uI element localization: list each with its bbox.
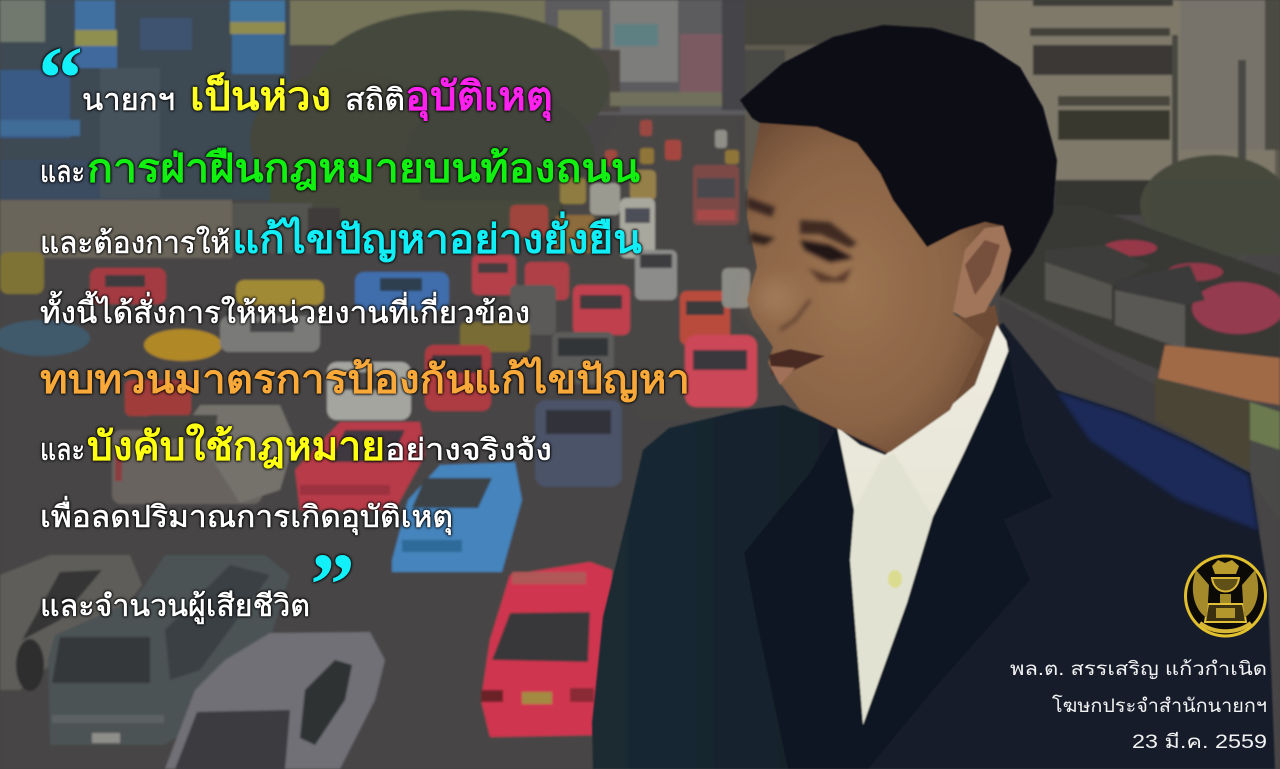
quote line 1: เป็นห่วง [190, 71, 331, 119]
inner ear [965, 240, 1000, 295]
quote line 7: เพื่อลดปริมาณการเกิดอุบัติเหตุ [40, 496, 453, 536]
neck [830, 305, 1003, 455]
quote line 1 [82, 71, 553, 122]
spokesman credit: 23 มี.ค. 2559 [1132, 731, 1267, 753]
distant road [540, 115, 790, 420]
nose highlight [755, 280, 795, 316]
icon: government seal [1186, 556, 1266, 636]
right roadside: fence, stalls and umbrellas [1000, 205, 1280, 440]
shirt button [888, 570, 902, 588]
closing quotation mark: ” [310, 536, 355, 635]
spokesman credit: พล.ต. สรรเสริญ แก้วกำเนิด [1010, 659, 1267, 680]
spokesman credit: โฆษกประจำสำนักนายกฯ [1052, 694, 1267, 717]
blue umbrella [0, 320, 90, 356]
quote line 1: สถิติ [345, 84, 405, 117]
left lapel [744, 427, 863, 769]
quote line 3 [40, 211, 642, 263]
lower lip [770, 366, 795, 385]
quote line 8: และจำนวนผู้เสียชีวิต [40, 590, 310, 624]
foreground cars [0, 555, 614, 769]
spokesman credit [1010, 659, 1267, 753]
silver car left [0, 555, 142, 691]
white shirt [837, 325, 1010, 725]
quote line 2: การฝ่าฝืนกฎหมายบนท้องถนน [87, 147, 640, 191]
sky and distant buildings [285, 0, 752, 115]
quote line 6: อย่างจริงจัง [385, 434, 552, 467]
far-off small cars [560, 120, 739, 215]
dark suit jacket [592, 323, 1275, 769]
quote line 6: และ [40, 434, 85, 467]
red taxi [481, 562, 614, 737]
quote line 6 [40, 423, 552, 469]
distant traffic cars [0, 198, 750, 384]
quote line 4: ทั้งนี้ได้สั่งการให้หน่วยงานที่เกี่ยวข้อง [40, 291, 530, 330]
dark pickup [48, 555, 290, 745]
shirt collar fold [850, 453, 933, 725]
left blue overpass structure [0, 0, 290, 200]
ear [953, 226, 1011, 318]
blue shoulder sheen [1057, 392, 1258, 530]
silver sedan [165, 632, 385, 769]
mid traffic cars [112, 335, 757, 572]
hair [740, 25, 1057, 297]
distant bus [693, 165, 739, 225]
orange umbrella [144, 329, 222, 361]
right lapel [860, 323, 1052, 769]
quote line 1: นายกฯ [82, 84, 175, 117]
mouth [769, 349, 825, 375]
eye, brow and facial shadows [747, 197, 857, 330]
photo of spokesman [592, 25, 1275, 769]
right building [745, 0, 1280, 260]
right side trees [1140, 155, 1280, 255]
opening quotation mark: “ [38, 29, 83, 128]
quote line 5: ทบทวนมาตรการป้องกันแก้ไขปัญหา [40, 356, 690, 403]
quote line 6: บังคับใช้กฎหมาย [87, 423, 385, 469]
quote line 1: อุบัติเหตุ [405, 75, 553, 122]
orange bus [1155, 345, 1280, 520]
quote line 3: แก้ไขปัญหาอย่างยั่งยืน [232, 211, 642, 263]
left wall [0, 200, 232, 258]
face [747, 120, 1010, 452]
quote line 2: และ [40, 156, 85, 189]
quote line 3: และต้องการให้ [40, 226, 230, 260]
central dark trees [250, 10, 610, 240]
